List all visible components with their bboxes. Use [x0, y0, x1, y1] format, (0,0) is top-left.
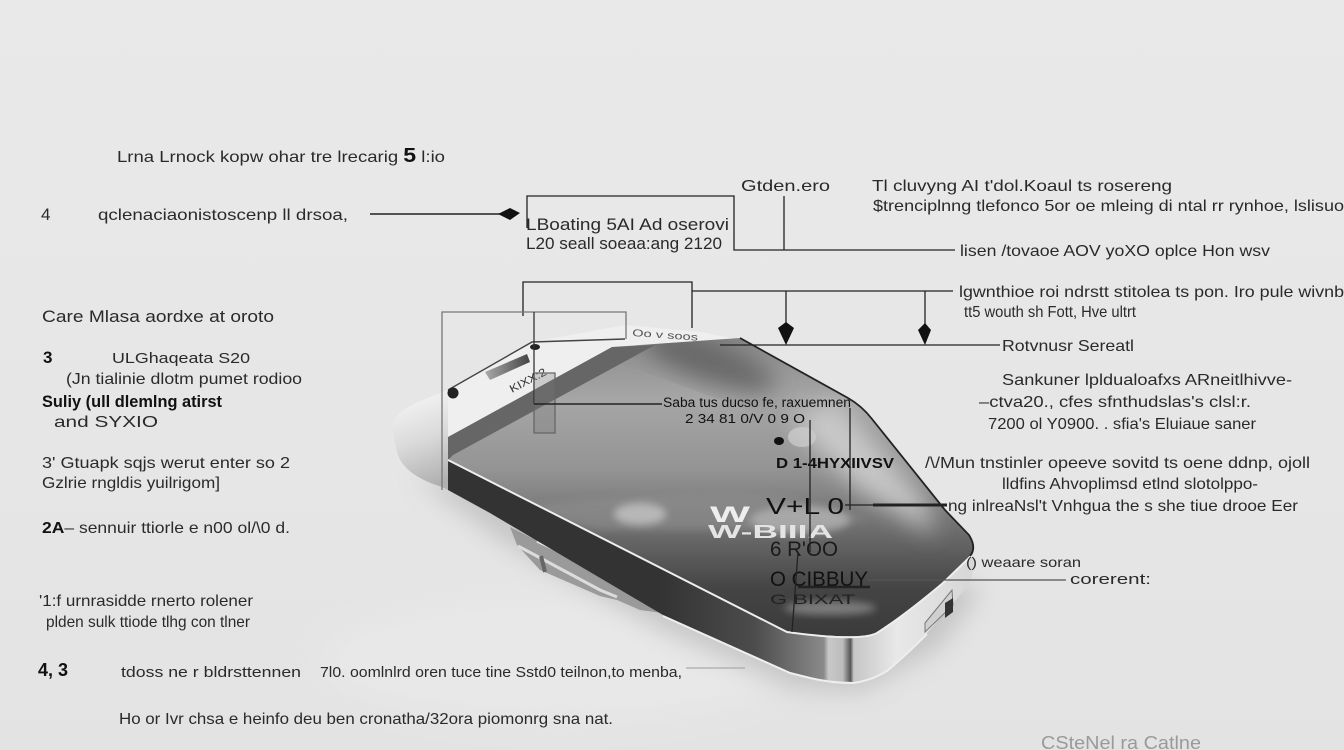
- right top text block: Tl cluvyng AI t'dol.Koaul ts rosereng: [872, 178, 1172, 195]
- left block 3: (Jn tialinie dlotm pumet rodioo: [66, 371, 302, 388]
- screen text: Saba tus ducso fe, raxuemnen: [663, 395, 851, 410]
- number 4 row: qclenaciaonistoscenp ll drsoa,: [98, 207, 348, 224]
- earpiece speaker: [485, 354, 530, 380]
- right small labels: [966, 554, 1151, 588]
- left block 3: Suliy (ull dlemlng atirst: [42, 392, 222, 411]
- right small labels: corerent:: [1070, 571, 1151, 588]
- right label row 2: lgwnthioe roi ndrstt stitolea ts pon. Iro pule wivnb: [959, 284, 1344, 301]
- bezel outline: [448, 339, 625, 390]
- right text block lower: ng inlreaNsl't Vnhgua the s she tiue drooe Eer: [948, 498, 1299, 515]
- screen text: 2 34 81 0/V 0 9 O: [685, 411, 805, 426]
- left block 1: '1:f urnrasidde rnerto rolener: [39, 593, 254, 610]
- dark side band and metal edge: [448, 460, 974, 682]
- right text block lower: [925, 455, 1310, 515]
- screen text: 6 R'OO: [770, 538, 838, 561]
- left block 3: ULGhaqeata S20: [112, 350, 250, 367]
- screen text: G BIXAT: [770, 591, 856, 607]
- lens glyph on screen: [774, 427, 816, 447]
- right top text block: $trenciplnng tlefonco 5or oe mleing di ntal rr rynhoe, lslisuo: [873, 198, 1344, 215]
- left block 2: [42, 455, 290, 492]
- left row 2: 2A– sennuir ttiorle e n00 ol/\0 d.: [42, 520, 290, 537]
- screen text: O CIBBUY: [770, 568, 868, 591]
- number 4 row: [41, 205, 348, 224]
- left block 1: plden sulk ttiode tlhg con tlner: [46, 614, 251, 631]
- screen text: [508, 328, 894, 607]
- screen text: Oo v soos: [632, 328, 698, 344]
- right text block: 7200 ol Y0900. . sfia's Eluiaue saner: [988, 416, 1257, 433]
- left block 3: [42, 348, 302, 431]
- screen text: V+L 0: [766, 493, 844, 519]
- center callout: LBoating 5AI Ad oserovi: [526, 215, 729, 234]
- arrowhead 1: [778, 322, 794, 345]
- right small labels: () weaare soran: [966, 554, 1081, 570]
- bottom row: 7l0. oomlnlrd oren tuce tine Sstd0 teilnon,to menba,: [320, 664, 682, 681]
- phone illustration: [393, 319, 982, 692]
- right label row 1: lisen /tovaoe AOV yoXO oplce Hon wsv: [960, 243, 1270, 260]
- center callout: L20 seall soeaa:ang 2120: [526, 234, 722, 253]
- left block 2: Gzlrie rngldis yuilrigom]: [42, 475, 220, 492]
- screen text: KIXX:2: [508, 366, 549, 396]
- right text block lower: /\/Mun tnstinler opeeve sovitd ts oene ddnp, ojoll: [925, 455, 1310, 472]
- right text block lower: lldfins Ahvoplimsd etlnd slotolppo-: [1002, 476, 1258, 493]
- phone left end: [393, 390, 448, 490]
- side buttons: [510, 527, 662, 613]
- heading: centre right: Gtden.ero: [741, 178, 830, 195]
- right label row 2: [959, 284, 1344, 321]
- arrowhead 2: [918, 323, 931, 345]
- camera dots: [448, 388, 458, 398]
- USB port: [925, 590, 953, 632]
- arrowhead left: [498, 208, 520, 220]
- bottom row: 4, 3: [38, 660, 68, 680]
- screen text: W: [710, 502, 750, 527]
- bottom caption: Ho or Ivr chsa e heinfo deu ben cronatha/32ora piomonrg sna nat.: [119, 711, 613, 728]
- bottom row: tdoss ne r bldrsttennen: [121, 664, 301, 681]
- screen outline: [740, 338, 973, 556]
- left heading: Care Mlasa aordxe at oroto: [42, 307, 274, 326]
- right label row 2: tt5 wouth sh Fott, Hve ultrt: [964, 304, 1137, 321]
- right text block: –ctva20., cfes sfnthudslas's clsl:r.: [979, 394, 1251, 411]
- bottom row: [38, 660, 682, 681]
- left block 2: 3' Gtuapk sqjs werut enter so 2: [42, 455, 290, 472]
- screen rim highlights: [448, 460, 972, 637]
- top bezel: [448, 325, 742, 437]
- phone shadow: [415, 478, 982, 692]
- screen text: D 1-4HYXIIVSV: [776, 455, 894, 472]
- leader lines: [370, 196, 1066, 668]
- left block 3: 3: [43, 348, 52, 367]
- top-left label: Lrna Lrnock kopw ohar tre lrecarig 5 l:io: [117, 145, 445, 167]
- left block 3: and SYXIO: [54, 414, 158, 431]
- right top text block: [872, 178, 1344, 215]
- bottom rim: [663, 616, 927, 683]
- screen: [448, 338, 972, 636]
- right text block: [979, 372, 1292, 433]
- number 4 row: 4: [41, 205, 50, 224]
- left block 1: [39, 593, 254, 631]
- screen text: W-BIIIA: [708, 522, 833, 542]
- right label: serial: Rotvnusr Sereatl: [1002, 338, 1134, 355]
- center callout: [526, 215, 729, 253]
- right text block: Sankuner lpldualoafxs ARneitlhivve-: [1002, 372, 1292, 389]
